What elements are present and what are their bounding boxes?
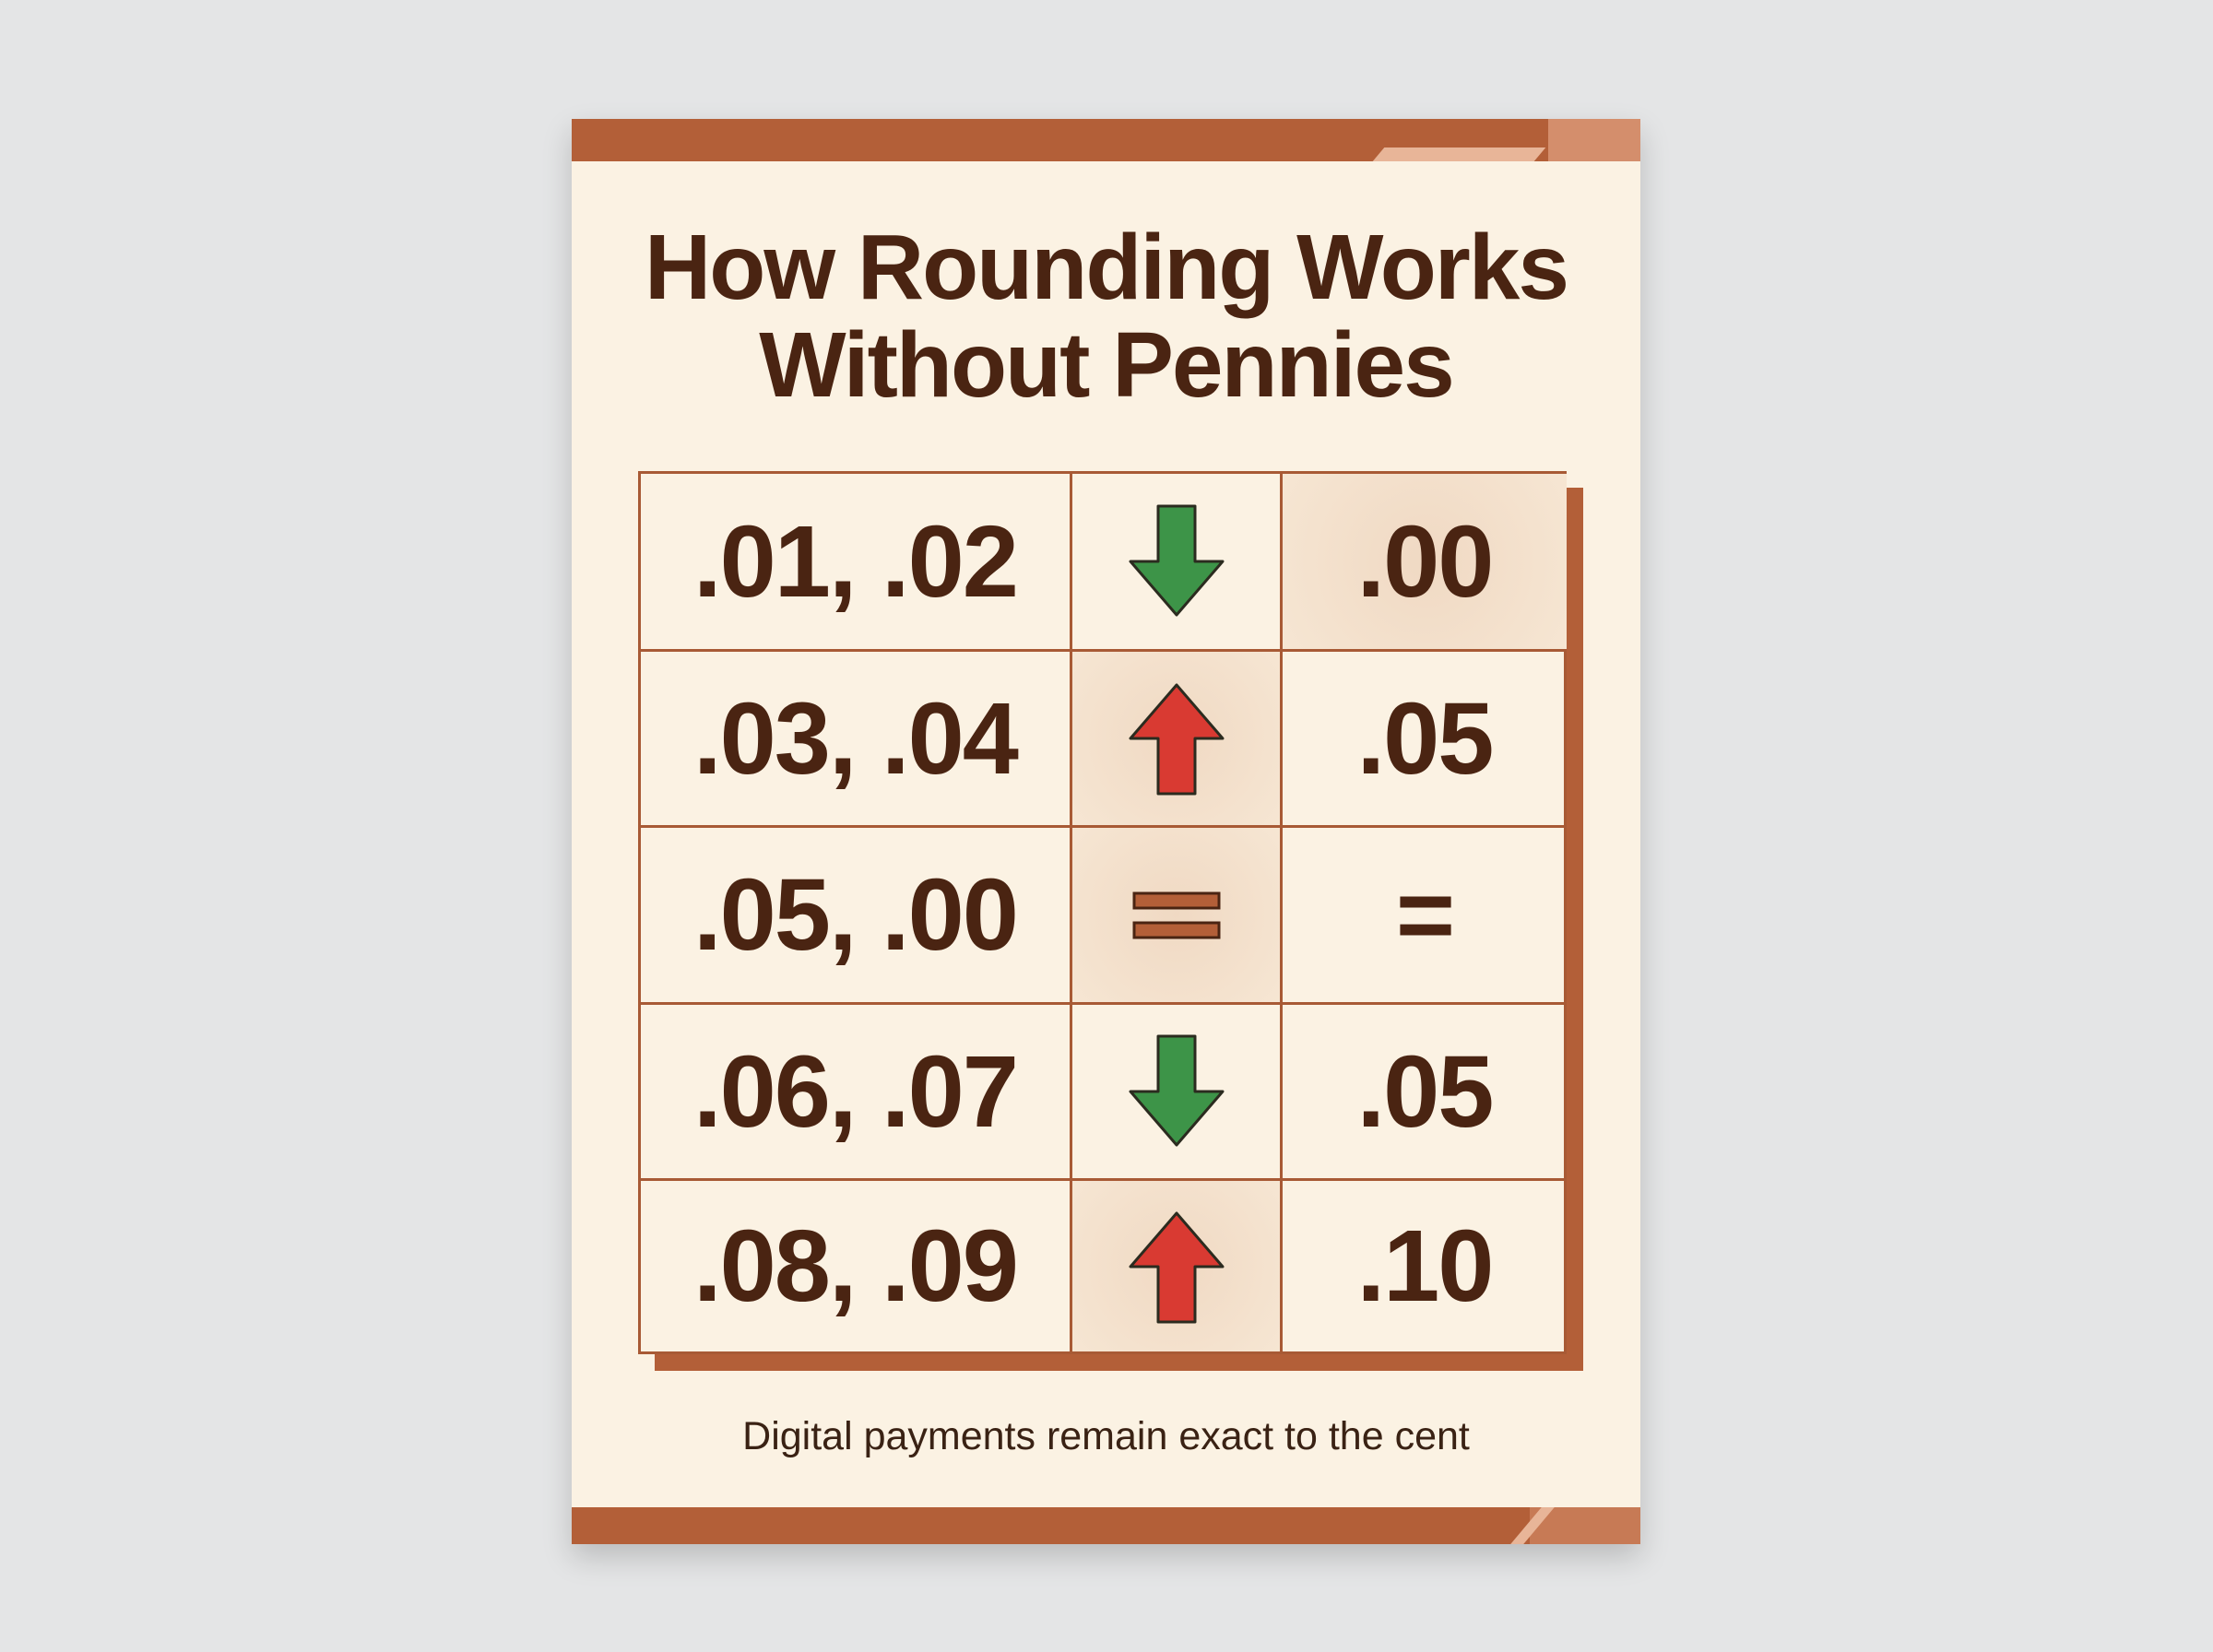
row 5: .08, .09 — [693, 1210, 1017, 1323]
row 1 — [641, 474, 1072, 652]
rounding table: .10 — [1357, 1210, 1492, 1323]
row 4: .06, .07 — [693, 1034, 1017, 1149]
row 3: .05, .00 — [693, 858, 1017, 972]
icon: red up arrow — [1129, 1211, 1225, 1324]
icon: green down arrow — [1129, 1034, 1225, 1147]
icon: red up arrow — [1129, 683, 1225, 795]
rounding table — [638, 471, 1567, 1354]
rounding table: = — [1396, 858, 1453, 972]
table shadow — [655, 488, 1583, 1371]
card — [572, 119, 1640, 1544]
rounding table: .05 — [1357, 682, 1492, 795]
row 2 — [641, 652, 1072, 828]
row 2: .03, .04 — [693, 682, 1017, 795]
rounding table: .00 — [1357, 505, 1492, 618]
icon: equals — [1132, 892, 1221, 938]
title — [645, 216, 1568, 417]
subtitle: Digital payments remain exact to the cent — [742, 1414, 1470, 1458]
rounding table: .05 — [1357, 1034, 1492, 1149]
row 5 — [641, 1181, 1072, 1351]
row 3 — [641, 828, 1072, 1005]
title: How Rounding Works — [645, 216, 1568, 319]
top bar — [572, 119, 1640, 161]
icon: green down arrow — [1129, 505, 1225, 617]
row 1: .01, .02 — [693, 505, 1017, 618]
row 4 — [641, 1005, 1072, 1181]
bottom bar — [572, 1507, 1640, 1544]
title: Without Pennies — [759, 313, 1453, 417]
